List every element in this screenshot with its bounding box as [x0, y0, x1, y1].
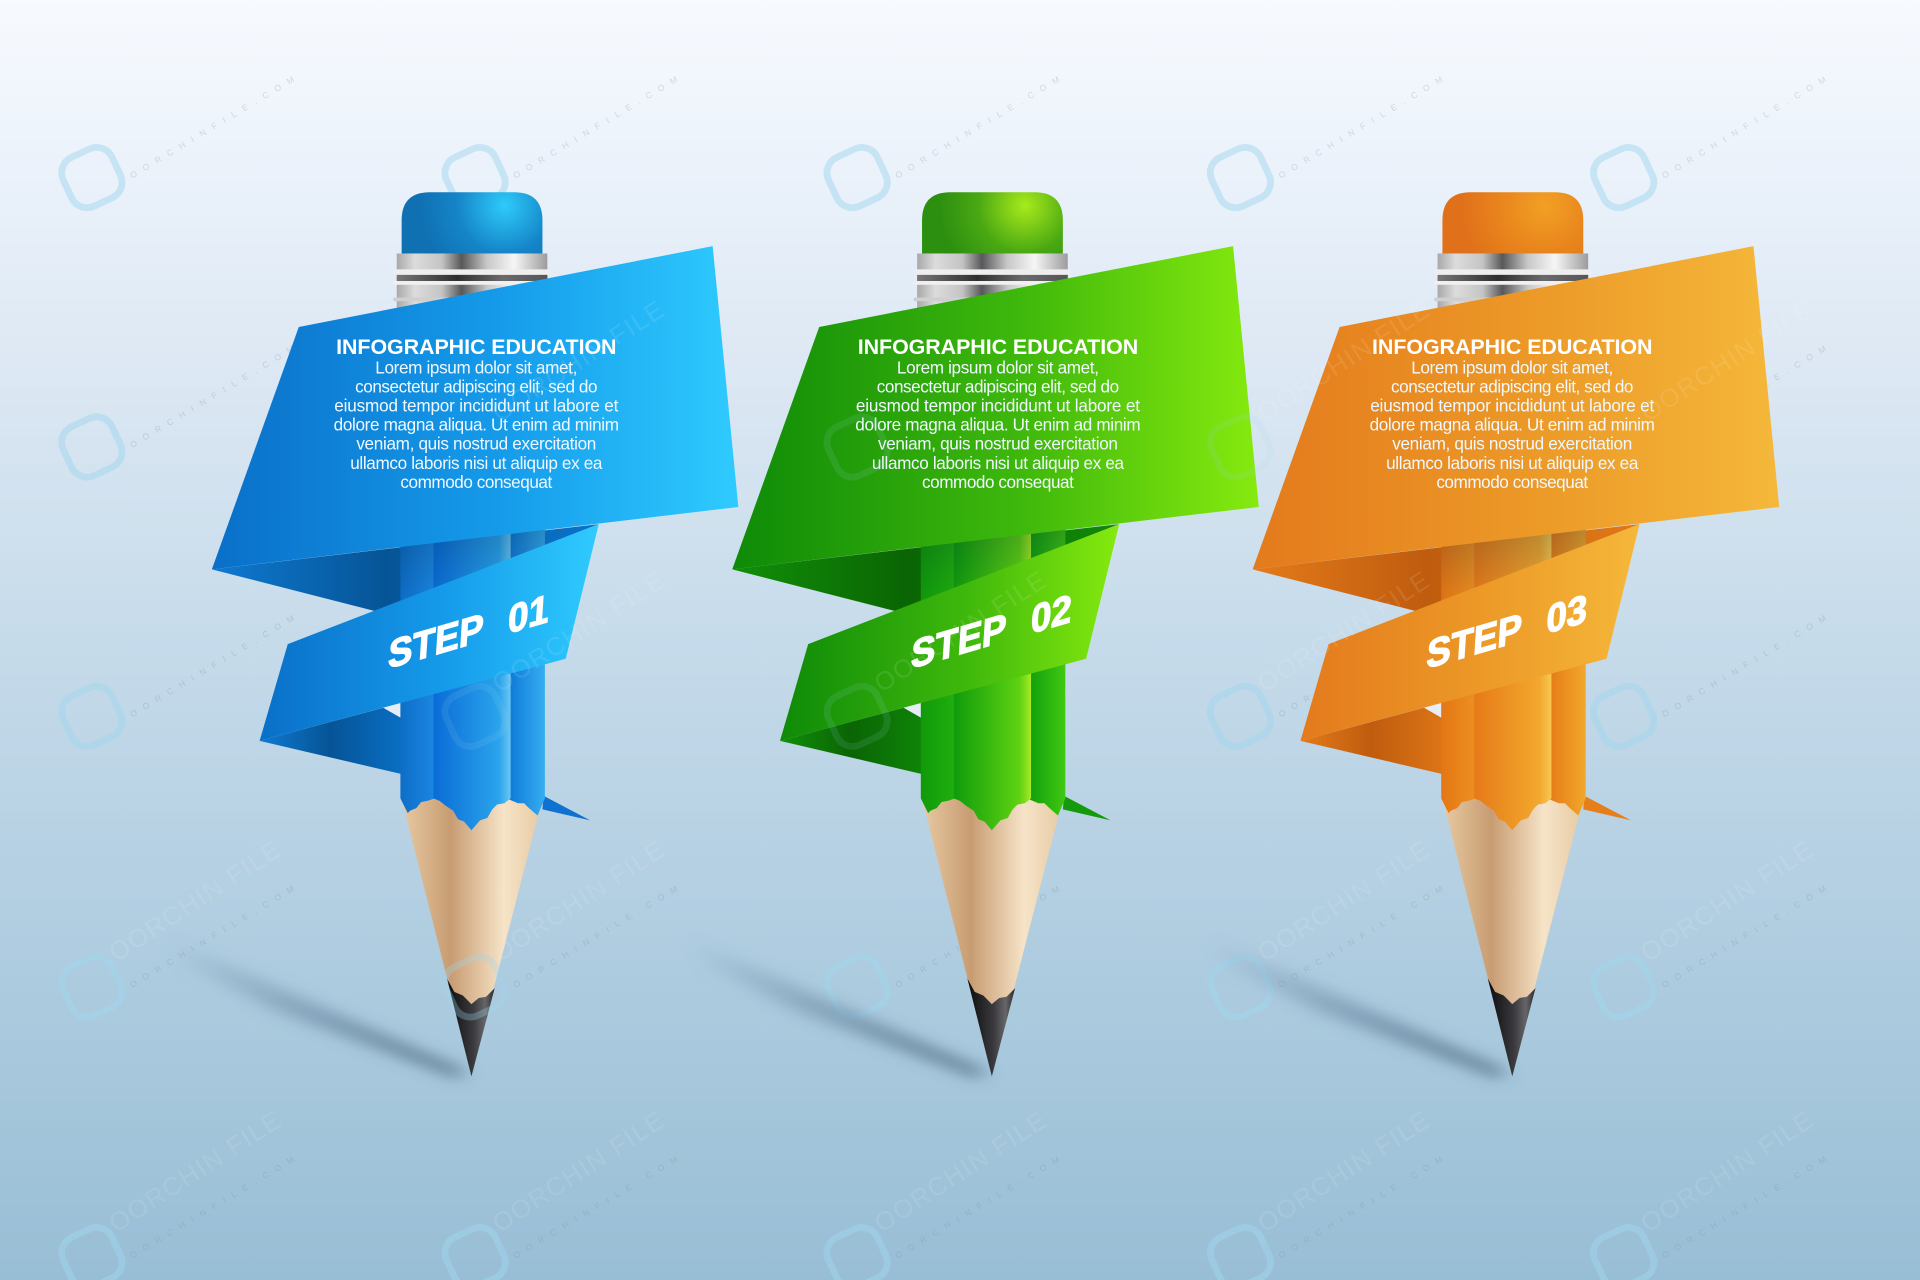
banner body text: ullamco laboris nisi ut aliquip ex ea	[350, 453, 603, 473]
watermark grid: OORCHINFILE.COM	[511, 1154, 679, 1260]
gap triangle	[383, 702, 400, 718]
body shade	[400, 520, 545, 606]
watermark grid: OORCHINFILE.COM	[1277, 1154, 1445, 1260]
pencil middle facet	[1474, 306, 1551, 830]
gap triangle	[1424, 702, 1441, 718]
banner body text: commodo consequat	[922, 472, 1074, 492]
ribbon tail	[1063, 796, 1111, 820]
banner body text: consectetur adipiscing elit, sed do	[877, 376, 1119, 396]
watermark grid: OORCHINFILE.COM	[1660, 344, 1828, 450]
watermark grid: OORCHINFILE.COM	[128, 344, 296, 450]
faint watermarks over artwork: OORCHIN FILE	[1253, 567, 1435, 698]
ferrule	[393, 253, 551, 313]
gap triangle	[904, 702, 921, 718]
step label: STEP 02	[910, 587, 1073, 678]
body shade	[1441, 520, 1586, 606]
step ribbon band	[260, 524, 599, 741]
banner heading: INFOGRAPHIC EDUCATION	[336, 335, 617, 359]
wood cone	[400, 793, 544, 1075]
pencil left facet	[921, 306, 955, 813]
watermark grid: OORCHINFILE.COM	[1660, 613, 1828, 719]
faint watermarks over artwork	[439, 296, 1818, 1023]
banner body text: dolore magna aliqua. Ut enim ad minim	[855, 414, 1141, 434]
faint watermarks over artwork: OORCHIN FILE	[870, 567, 1051, 698]
banner body text: Lorem ipsum dolor sit amet,	[375, 357, 577, 377]
banner body text: dolore magna aliqua. Ut enim ad minim	[1370, 414, 1655, 434]
banner body text: consectetur adipiscing elit, sed do	[1391, 376, 1633, 396]
watermark grid: OORCHINFILE.COM	[893, 1154, 1061, 1260]
pencil middle facet	[433, 306, 511, 830]
pencil left facet	[400, 306, 435, 813]
banner heading: INFOGRAPHIC EDUCATION	[858, 335, 1138, 359]
pencil right facet	[1550, 306, 1586, 816]
banner body text: commodo consequat	[1436, 472, 1588, 492]
watermark grid: OORCHINFILE.COM	[128, 884, 296, 990]
upper ribbon fold	[1253, 524, 1640, 611]
banner body text: eiusmod tempor incididunt ut labore et	[1370, 395, 1655, 415]
watermark grid: OORCHINFILE.COM	[1660, 74, 1828, 180]
banner body text: commodo consequat	[400, 472, 552, 492]
faint watermarks over artwork: OORCHIN FILE	[1253, 296, 1435, 427]
watermark grid: OORCHINFILE.COM	[128, 74, 296, 180]
banner body text: eiusmod tempor incididunt ut labore et	[856, 395, 1140, 415]
watermark grid: OORCHINFILE.COM	[1660, 1154, 1828, 1260]
step ribbon band	[1300, 524, 1640, 741]
watermark grid: OORCHINFILE.COM	[511, 74, 679, 180]
pencil step 02	[686, 192, 1259, 1076]
watermark grid: OORCHINFILE.COM	[1277, 74, 1445, 180]
banner body text: veniam, quis nostrud exercitation	[1392, 433, 1632, 453]
faint watermarks over artwork: OORCHIN FILE	[488, 567, 669, 698]
pencil shadow	[686, 937, 992, 1075]
watermark grid: OORCHIN FILE	[104, 1107, 286, 1238]
watermark grid: OORCHINFILE.COM	[1660, 884, 1828, 990]
main ribbon banner	[212, 246, 738, 569]
pencil right facet	[1030, 306, 1065, 816]
pencil step 03	[1206, 192, 1779, 1076]
lower ribbon fold	[260, 708, 416, 778]
pencil shadow	[165, 937, 471, 1075]
eraser	[402, 192, 542, 255]
banner body text	[855, 357, 1141, 492]
pencil lead	[1488, 978, 1536, 1076]
main ribbon banner	[1253, 246, 1779, 569]
watermark grid: OORCHIN FILE	[488, 1107, 669, 1238]
step label: STEP 03	[1425, 587, 1589, 678]
lower ribbon fold	[780, 708, 937, 778]
banner body text	[334, 357, 619, 492]
pencil middle facet	[954, 306, 1031, 830]
banner body text: Lorem ipsum dolor sit amet,	[1411, 357, 1613, 377]
watermark grid: OORCHIN FILE	[1253, 836, 1435, 967]
faint watermarks over artwork: OORCHIN FILE	[1636, 296, 1818, 427]
watermark grid: OORCHINFILE.COM	[893, 884, 1061, 990]
watermark grid: OORCHIN FILE	[870, 1107, 1051, 1238]
banner body text: ullamco laboris nisi ut aliquip ex ea	[1386, 453, 1639, 473]
watermark grid: OORCHIN FILE	[488, 836, 669, 967]
watermark grid: OORCHINFILE.COM	[1277, 884, 1445, 990]
watermark grid: OORCHIN FILE	[1636, 836, 1818, 967]
faint watermarks over artwork: OORCHIN FILE	[488, 296, 669, 427]
step label: STEP 01	[387, 587, 550, 678]
eraser	[922, 192, 1063, 255]
watermark grid: OORCHIN FILE	[1253, 1107, 1435, 1238]
banner body text: veniam, quis nostrud exercitation	[878, 433, 1118, 453]
pencil lead	[447, 978, 495, 1076]
ribbon tail	[1583, 796, 1631, 820]
watermark grid: OORCHINFILE.COM	[1277, 613, 1445, 719]
watermark grid: OORCHIN FILE	[1636, 1107, 1818, 1238]
lower ribbon fold	[1300, 708, 1457, 778]
wood cone	[1441, 793, 1584, 1075]
watermark grid: OORCHINFILE.COM	[128, 1154, 296, 1260]
ribbon tail	[542, 796, 590, 820]
pencil step 01	[165, 192, 738, 1076]
eraser	[1442, 192, 1583, 255]
watermark grid: OORCHINFILE.COM	[511, 884, 679, 990]
ferrule	[1434, 253, 1592, 313]
banner body text: Lorem ipsum dolor sit amet,	[897, 357, 1099, 377]
banner body text: veniam, quis nostrud exercitation	[356, 433, 596, 453]
wood cone	[921, 793, 1064, 1075]
banner body text: eiusmod tempor incididunt ut labore et	[334, 395, 619, 415]
banner body text: consectetur adipiscing elit, sed do	[355, 376, 598, 396]
watermark grid: OORCHIN FILE	[104, 836, 286, 967]
banner body text	[1370, 357, 1655, 492]
pencil shadow	[1206, 937, 1512, 1075]
upper ribbon fold	[732, 524, 1119, 611]
step ribbon band	[780, 524, 1119, 741]
ferrule	[913, 253, 1071, 313]
watermark grid: OORCHINFILE.COM	[893, 74, 1061, 180]
banner heading: INFOGRAPHIC EDUCATION	[1372, 335, 1652, 359]
banner body text: dolore magna aliqua. Ut enim ad minim	[334, 414, 619, 434]
pencil lead	[967, 978, 1015, 1076]
banner body text: ullamco laboris nisi ut aliquip ex ea	[872, 453, 1125, 473]
watermark grid: OORCHINFILE.COM	[128, 613, 296, 719]
upper ribbon fold	[212, 524, 599, 611]
pencil right facet	[509, 306, 545, 816]
body shade	[921, 520, 1065, 606]
main ribbon banner	[732, 246, 1259, 569]
pencil left facet	[1441, 306, 1476, 813]
